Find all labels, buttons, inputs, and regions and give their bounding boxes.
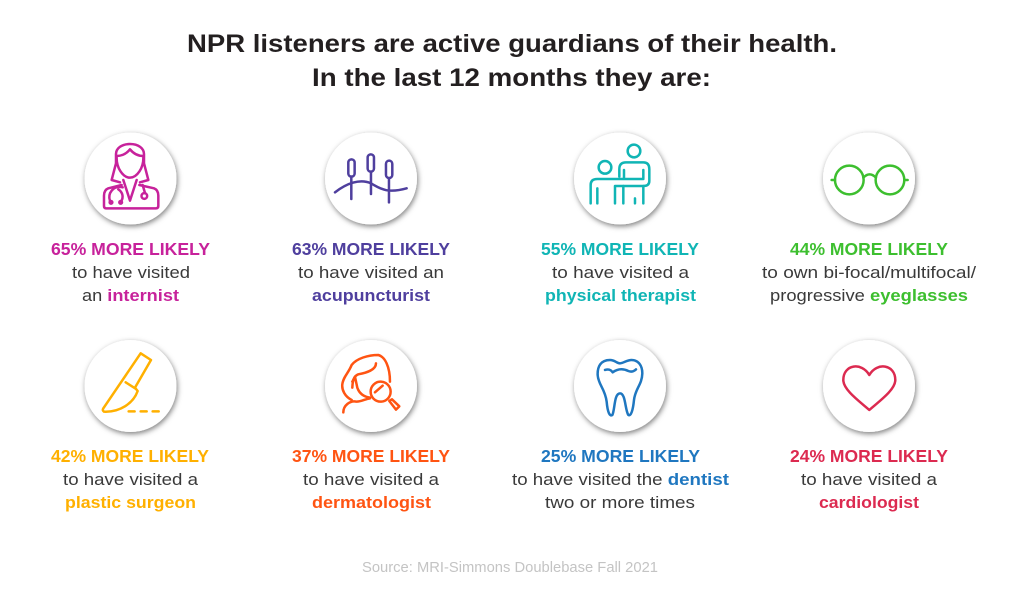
- panel: eyeglasses: [762, 132, 976, 305]
- icon: tooth: [598, 360, 642, 415]
- description highlight: physical therapist: [545, 286, 696, 305]
- description: to have visited a: [552, 263, 690, 282]
- icon: glasses: [832, 166, 908, 194]
- stat: 37%: 37% MORE LIKELY: [292, 446, 450, 466]
- description: two or more times: [545, 493, 695, 512]
- description: to own bi-focal/multifocal/: [762, 263, 976, 282]
- stat: 24%: 24% MORE LIKELY: [790, 446, 948, 466]
- stat: 63%: 63% MORE LIKELY: [292, 239, 450, 259]
- description highlight: dermatologist: [312, 493, 431, 512]
- panel: internist: [51, 132, 210, 305]
- icon: doctor: [104, 144, 158, 208]
- panel: dentist: [512, 340, 729, 512]
- stat: 55%: 55% MORE LIKELY: [541, 239, 699, 259]
- description highlight: progressive eyeglasses: [770, 286, 968, 305]
- description: to have visited: [72, 263, 190, 282]
- icon: hair and magnifier: [342, 355, 399, 412]
- panel: physical therapist: [541, 132, 699, 305]
- title: [187, 30, 837, 92]
- panel: dermatologist: [292, 340, 450, 512]
- description highlight: to have visited the dentist: [512, 470, 729, 489]
- stat: 25%: 25% MORE LIKELY: [541, 446, 700, 466]
- source note: Source: MRI-Simmons Doublebase Fall 2021: [362, 559, 658, 576]
- description: to have visited a: [63, 470, 199, 489]
- title: In the last 12 months they are:: [312, 64, 711, 92]
- description: to have visited an: [298, 263, 444, 282]
- description: to have visited a: [303, 470, 440, 489]
- description highlight: acupuncturist: [312, 286, 430, 305]
- title: NPR listeners are active guardians of their health.: [187, 30, 837, 58]
- stat: 42%: 42% MORE LIKELY: [51, 446, 209, 466]
- icon: acupuncture needles: [335, 154, 407, 202]
- panel: cardiologist: [790, 340, 948, 512]
- panel: acupuncturist: [292, 132, 450, 305]
- description highlight: cardiologist: [819, 493, 919, 512]
- stat: 44%: 44% MORE LIKELY: [790, 239, 948, 259]
- description highlight: an internist: [82, 286, 179, 305]
- icon: scalpel: [103, 353, 159, 412]
- description: to have visited a: [801, 470, 938, 489]
- icon: heart: [843, 366, 895, 410]
- description highlight: plastic surgeon: [65, 493, 196, 512]
- stat: 65%: 65% MORE LIKELY: [51, 239, 210, 259]
- icon: therapist and patient: [591, 145, 649, 203]
- panel: plastic surgeon: [51, 340, 209, 512]
